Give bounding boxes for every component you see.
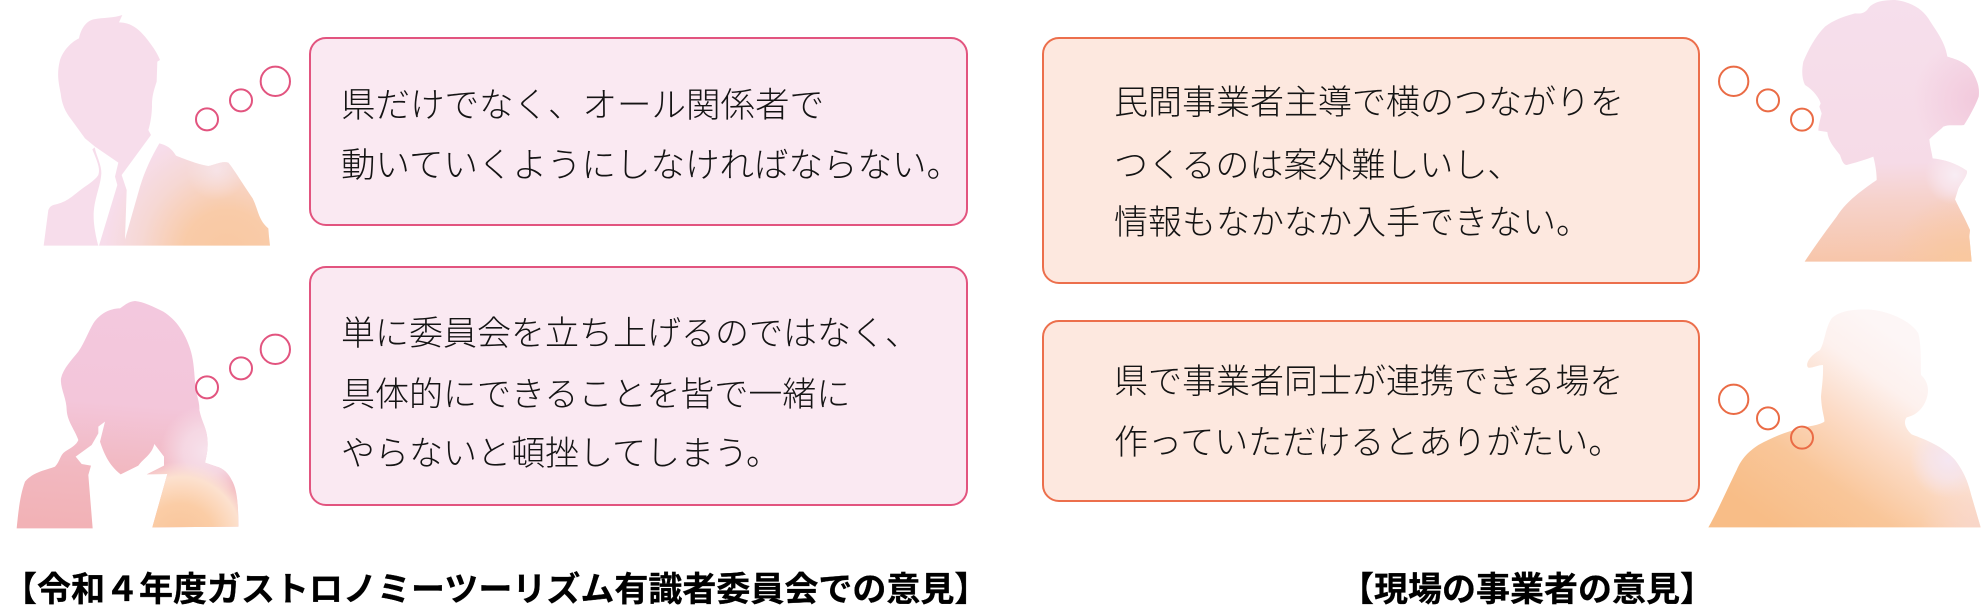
text: bottom right opinion xyxy=(1114,354,1623,464)
text: top right opinion: 民間事業者主導で横のつながりを xyxy=(1114,75,1624,124)
text: bottom left opinion: 具体的にできることを皆で一緒に xyxy=(341,367,850,416)
thought bubbles: man xyxy=(196,67,290,130)
text: bottom left opinion: やらないと頓挫してしまう。 xyxy=(341,426,780,475)
speech box: bottom left opinion xyxy=(309,266,968,506)
thought bubbles: woman xyxy=(196,335,290,398)
text: bottom left opinion xyxy=(341,306,919,475)
speech box: top left opinion xyxy=(309,37,968,226)
text: bottom right opinion: 作っていただけるとありがたい。 xyxy=(1114,415,1622,464)
speech box: bottom right opinion xyxy=(1042,320,1700,502)
silhouette: man xyxy=(44,15,270,246)
thought bubbles: man with cap xyxy=(1719,385,1813,449)
icon: woman with hair bun silhouette with thought bubbles xyxy=(1718,0,1979,262)
silhouette: woman with bun xyxy=(1802,0,1981,263)
icon: man in suit silhouette with thought bubbles xyxy=(44,15,291,246)
heading: right group caption: 【現場の事業者の意見】 xyxy=(1340,562,1714,611)
text: bottom left opinion: 単に委員会を立ち上げるのではなく、 xyxy=(341,306,919,355)
speech box: top right opinion xyxy=(1042,37,1700,284)
text: top left opinion xyxy=(341,77,961,187)
text: top right opinion: 情報もなかなか入手できない。 xyxy=(1114,195,1590,244)
silhouette: man with cap xyxy=(1708,309,1981,530)
silhouette: woman xyxy=(17,301,243,535)
icon: man with cap silhouette with thought bubbles xyxy=(1708,310,1981,528)
heading: left group caption: 【令和４年度ガストロノミーツーリズム有識者委員会での意見】 xyxy=(3,562,988,611)
thought bubbles: woman with bun xyxy=(1719,67,1813,131)
text: top right opinion xyxy=(1114,75,1624,244)
icon: woman with hand on chin silhouette with thought bubbles xyxy=(16,301,291,528)
text: bottom right opinion: 県で事業者同士が連携できる場を xyxy=(1114,354,1623,403)
text: top left opinion: 動いていくようにしなければならない。 xyxy=(341,137,961,187)
text: top right opinion: つくるのは案外難しいし、 xyxy=(1114,138,1521,187)
text: top left opinion: 県だけでなく、オール関係者で xyxy=(341,77,824,127)
